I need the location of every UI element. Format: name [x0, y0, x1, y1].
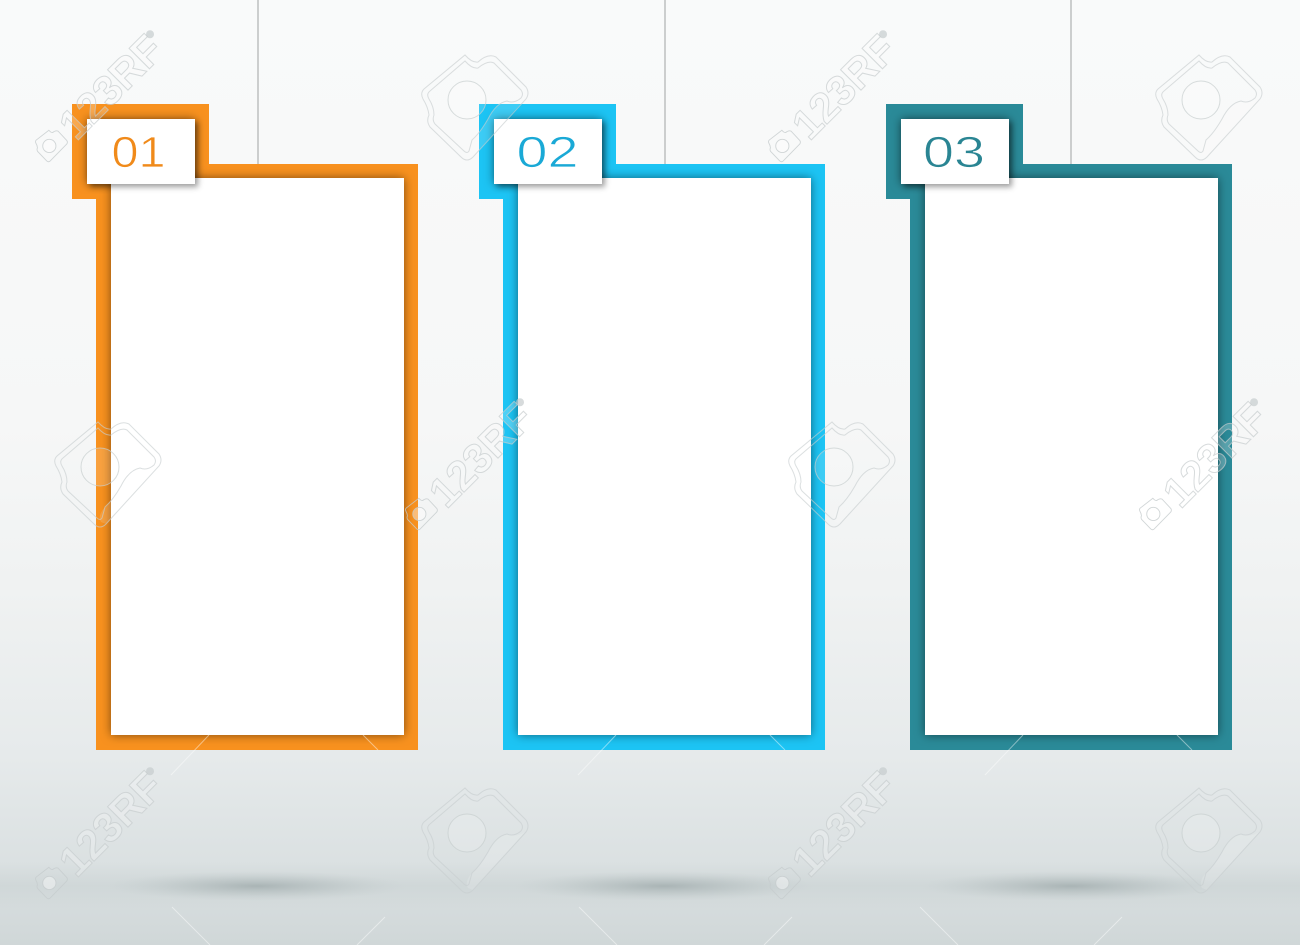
- panel 02: sky blue: [479, 104, 825, 750]
- panel 01: orange: [72, 104, 418, 750]
- number 02: 02: [516, 128, 578, 177]
- number 01: 01: [112, 128, 166, 177]
- hanging strings: [258, 0, 1071, 165]
- number 03: 03: [923, 128, 985, 177]
- panel 03: teal: [886, 104, 1232, 750]
- floor shadows: [0, 862, 1300, 910]
